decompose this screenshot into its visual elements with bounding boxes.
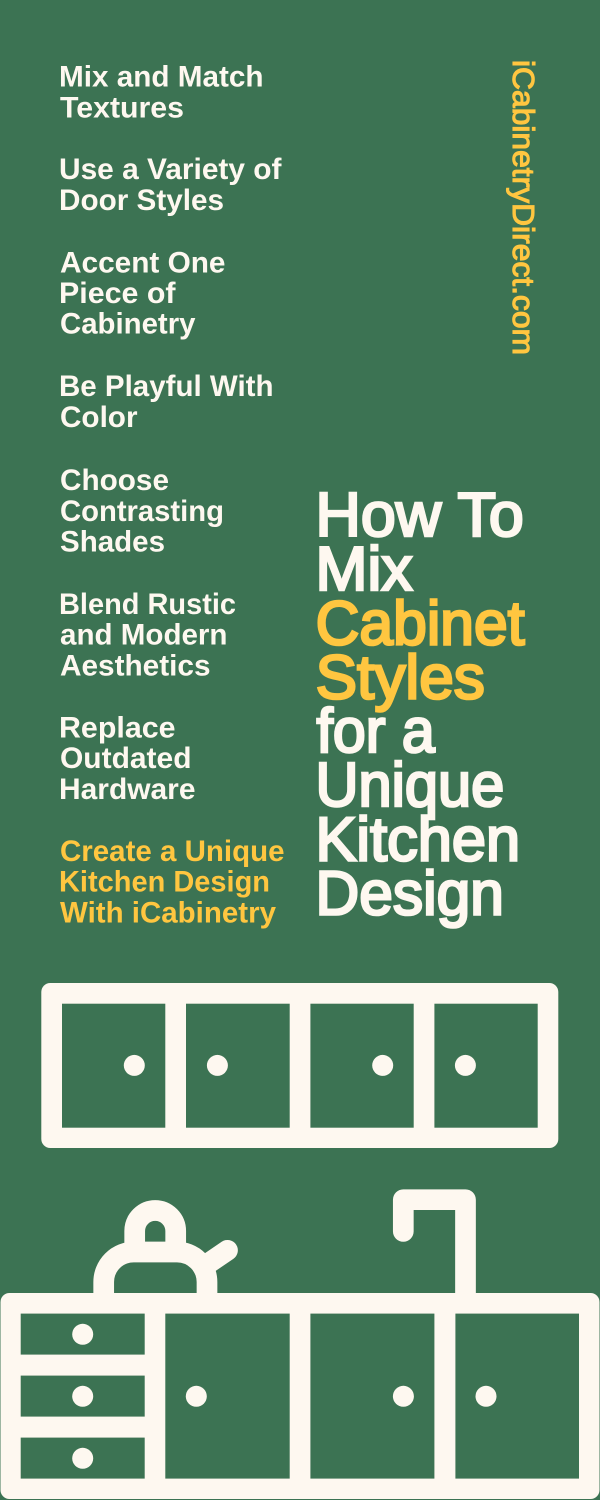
title line: How To: How To bbox=[316, 481, 524, 550]
tip: call to action: With iCabinetry bbox=[60, 896, 277, 929]
icon: upper wall cabinets bbox=[41, 983, 558, 1148]
tip: rustic and modern: and Modern bbox=[60, 619, 228, 652]
tip: mix and match textures bbox=[59, 61, 264, 124]
tip: call to action: Kitchen Design bbox=[59, 866, 270, 899]
tip: playful color: Be Playful With bbox=[59, 370, 274, 403]
website address: iCabinetryDirect.com bbox=[506, 60, 540, 355]
list of tips bbox=[59, 61, 284, 929]
tip: replace hardware bbox=[59, 711, 196, 806]
icon: kettle bbox=[104, 1210, 228, 1296]
tip: replace hardware: Hardware bbox=[59, 773, 196, 806]
tip: call to action: Create a Unique bbox=[60, 835, 284, 868]
tip: playful color: Color bbox=[60, 401, 138, 434]
tip: door styles bbox=[59, 153, 282, 217]
tip: contrasting shades: Shades bbox=[60, 526, 165, 559]
icon: faucet bbox=[403, 1200, 466, 1296]
title line: Cabinet: Cabinet bbox=[316, 589, 525, 658]
tip: mix and match textures: Textures bbox=[60, 91, 184, 124]
tip: replace hardware: Outdated bbox=[60, 742, 192, 775]
tip: accent one piece: Accent One bbox=[60, 246, 225, 279]
tip: contrasting shades: Contrasting bbox=[60, 495, 224, 528]
tip: accent one piece: Piece of bbox=[59, 277, 176, 310]
title bbox=[316, 481, 525, 929]
tip: mix and match textures: Mix and Match bbox=[59, 61, 264, 94]
tip: accent one piece bbox=[59, 246, 225, 341]
tip: playful color bbox=[59, 370, 274, 434]
title line: Mix: Mix bbox=[316, 535, 412, 604]
tip: rustic and modern: Aesthetics bbox=[60, 649, 210, 682]
tip: door styles: Use a Variety of bbox=[59, 153, 282, 186]
title line: Styles: Styles bbox=[316, 644, 485, 713]
tip: accent one piece: Cabinetry bbox=[60, 308, 196, 341]
tip: door styles: Door Styles bbox=[59, 184, 224, 217]
tip: contrasting shades: Choose bbox=[60, 464, 169, 497]
tip: rustic and modern bbox=[59, 588, 236, 682]
tip: contrasting shades bbox=[60, 464, 224, 559]
title line: Unique: Unique bbox=[316, 751, 504, 820]
tip: rustic and modern: Blend Rustic bbox=[59, 588, 236, 621]
title line: Kitchen: Kitchen bbox=[316, 805, 520, 874]
title line: for a: for a bbox=[316, 697, 435, 766]
tip: call to action bbox=[59, 835, 284, 929]
tip: replace hardware: Replace bbox=[59, 711, 176, 744]
icon: lower base cabinets bbox=[0, 1293, 600, 1499]
title line: Design: Design bbox=[316, 860, 504, 929]
